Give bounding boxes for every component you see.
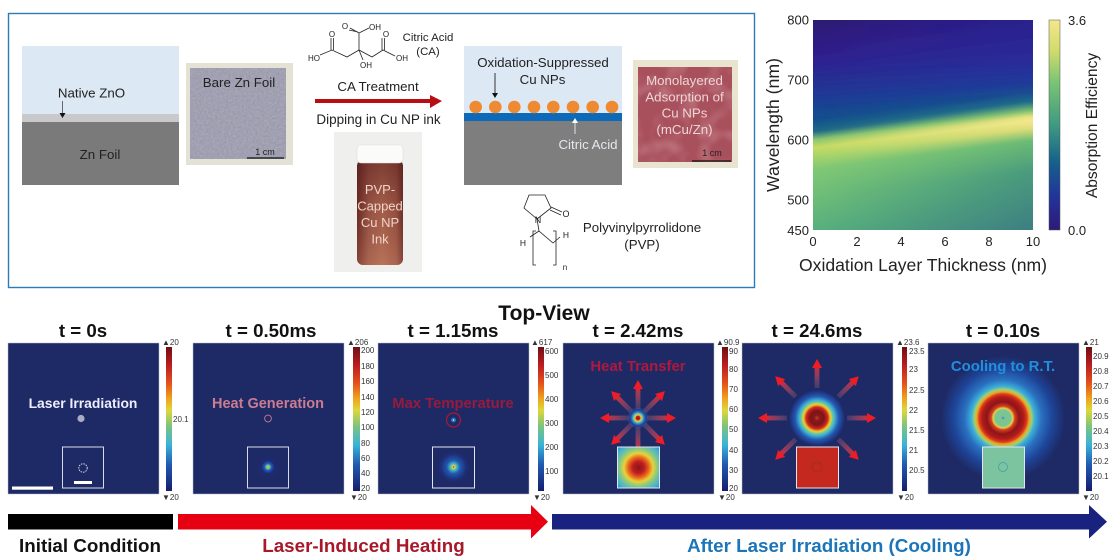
timeline: initial condition [8,514,173,556]
panel: t = 2.42ms: 30 [729,466,738,475]
panel: t = 0.10s: ▲21 [1082,338,1099,347]
y axis: 700 [787,72,809,88]
panel: t = 0.50ms: 80 [361,439,370,448]
panel: t = 0.10s: 20.1 [1093,472,1109,481]
x axis [799,234,1047,275]
photo: monolayered Cu NPs on Zn: Monolayered [646,73,723,88]
label: dipping step: Dipping in Cu NP ink [316,112,441,127]
panel: t = 2.42ms: 60 [729,405,738,414]
panel: t = 0.10s: 20.8 [1093,367,1109,376]
panel: t = 1.15ms: 600 [545,347,559,356]
photo: bare Zn foil [186,63,293,165]
arrows: heat spreading outward [758,359,876,463]
panel: t = 0.10s: 20.7 [1093,382,1109,391]
photo: bare Zn foil: Bare Zn Foil [203,75,275,90]
colorbar: Absorption Efficiency [1084,53,1101,198]
panel: t = 0.10s: Cooling to R.T. [951,359,1055,375]
chemical structure: PVP: H [520,238,526,248]
panel: t = 2.42ms: t = 2.42ms [593,320,683,341]
x axis: 10 [1026,234,1040,249]
label: polyvinylpyrrolidone: (PVP) [624,237,660,252]
chemical structure: citric acid [308,22,408,70]
chemical structure: citric acid: O [342,22,348,31]
panel: t = 1.15ms: 200 [545,443,559,452]
panel: t = 2.42ms: ▼20 [718,493,735,502]
panel: t = 24.6ms: 21 [909,446,918,455]
chemical structure: citric acid: OH [369,23,381,32]
panel: t = 24.6ms: 23.5 [909,347,925,356]
panel: t = 2.42ms: 80 [729,365,738,374]
panel: t = 0.10s: 20.5 [1093,412,1109,421]
panel: t = 24.6ms: 20.5 [909,466,925,475]
panel: t = 1.15ms: ▲617 [531,338,553,347]
panel: t = 0.50ms: ▼20 [350,493,367,502]
panel: t = 0.10s [928,320,1109,502]
photo: PVP-capped Cu NP ink bottle: Capped [357,198,403,214]
panel: t = 2.42ms: 90 [729,347,738,356]
x axis: 2 [853,234,861,249]
panel: t = 0.10s: 20.2 [1093,457,1109,466]
x axis: 4 [897,234,905,249]
panel: t = 24.6ms [742,320,925,502]
timeline: laser-induced heating: Laser-Induced Heating [262,535,465,556]
schematic: oxidation-suppressed Cu NPs: Cu NPs [520,72,566,87]
colorbar: 3.6 [1068,13,1086,28]
panel: t = 24.6ms: 23 [909,365,918,374]
schematic: oxidation-suppressed Cu NPs: Citric Acid [558,137,618,152]
chemical structure: PVP: N [535,215,541,225]
chemical structure: PVP: H [563,230,569,240]
panel: t = 0.50ms: 160 [361,377,375,386]
panel: t = 0.50ms: 40 [361,469,370,478]
label: citric acid: Citric Acid [403,32,453,44]
chemical structure: citric acid: OH [360,61,372,70]
panel: t = 1.15ms [378,320,559,502]
panel: t = 24.6ms: 22 [909,406,918,415]
panel: t = 2.42ms: Heat Transfer [590,359,686,375]
colorbar [1049,13,1101,238]
y axis [763,12,809,238]
panel: t = 1.15ms: Max Temperature [392,396,514,412]
panel: t = 2.42ms: 70 [729,385,738,394]
label: CA treatment: CA Treatment [337,79,419,94]
photo: PVP-capped Cu NP ink bottle: Cu NP [361,215,399,230]
panel: t = 0.50ms: 200 [361,346,375,355]
panel: t = 1.15ms: 400 [545,395,559,404]
panel: t = 24.6ms: 21.5 [909,426,925,435]
panel: t = 0s: t = 0s [59,320,107,341]
panel: t = 1.15ms: 500 [545,371,559,380]
photo: monolayered Cu NPs on Zn: (mCu/Zn) [656,122,713,137]
panel: t = 0.10s: 20.4 [1093,427,1109,436]
schematic: bare Zn foil with native ZnO [22,46,179,185]
panel: t = 0s: ▼20 [162,493,179,502]
arrows: heat spreading outward [600,380,676,456]
panel: t = 1.15ms: ▼20 [533,493,550,502]
photo: PVP-capped Cu NP ink bottle [334,132,422,272]
panel: t = 2.42ms: 40 [729,446,738,455]
schematic: bare Zn foil with native ZnO: Zn Foil [80,147,120,162]
heading: Top-View: Top-View [498,302,590,325]
chemical structure: citric acid: O [383,30,389,39]
panel: t = 0.50ms: 100 [361,423,375,432]
x axis: Oxidation Layer Thickness (nm) [799,255,1047,275]
timeline: laser-induced heating [178,505,548,556]
chemical structure: PVP: n [563,263,567,272]
photo: monolayered Cu NPs on Zn [633,60,738,168]
chemical structure: PVP [520,195,570,272]
panel: t = 0s: Laser Irradiation [29,395,137,411]
panel: t = 0s: ▲20 [162,338,179,347]
panel: t = 0.50ms: t = 0.50ms [226,320,316,341]
panel: t = 0.10s: 20.3 [1093,442,1109,451]
arrow: process direction [315,95,442,108]
panel: t = 1.15ms: 100 [545,467,559,476]
photo: bare Zn foil: 1 cm [255,147,275,157]
y axis: 800 [787,12,809,28]
photo: monolayered Cu NPs on Zn: 1 cm [702,148,722,158]
panel: t = 0.10s: ▼20 [1082,493,1099,502]
chart: absorption efficiency heat map [763,0,1101,275]
panel: t = 0.50ms: 120 [361,408,375,417]
panel: t = 0.50ms: 60 [361,454,370,463]
panel: t = 0.10s: 20.9 [1093,352,1109,361]
label: polyvinylpyrrolidone: Polyvinylpyrrolidone [583,220,701,235]
timeline: initial condition: Initial Condition [19,535,161,556]
panel: t = 0.50ms: ▲206 [347,338,369,347]
x axis: 0 [809,234,817,249]
panel: t = 0.10s: t = 0.10s [966,320,1040,341]
panel: Cu NP adsorption process [8,14,754,288]
x axis: 8 [985,234,993,249]
panel: t = 0s: 20.1 [173,415,189,424]
panel: t = 24.6ms: ▼20 [897,493,914,502]
panel: t = 1.15ms: 300 [545,419,559,428]
chemical structure: PVP: O [562,209,570,219]
panel: t = 0.50ms [193,320,375,502]
y axis: 600 [787,132,809,148]
panel: t = 2.42ms: 50 [729,425,738,434]
panel: t = 0.50ms: 180 [361,362,375,371]
y axis: 450 [787,223,809,238]
chemical structure: citric acid: OH [396,54,408,63]
schematic: oxidation-suppressed Cu NPs: Oxidation-Suppressed [477,55,609,70]
panel: t = 0.50ms: 20 [361,484,370,493]
panel: t = 24.6ms: 22.5 [909,386,925,395]
panel: t = 2.42ms: ▲90.9 [716,338,740,347]
schematic: bare Zn foil with native ZnO: Native ZnO [58,86,125,100]
y axis: 500 [787,192,809,208]
label: citric acid: (CA) [416,46,440,58]
chemical structure: citric acid: O [329,30,335,39]
timeline: after laser irradiation [552,505,1107,556]
x axis: 6 [941,234,949,249]
photo: monolayered Cu NPs on Zn: Cu NPs [662,106,708,121]
schematic: oxidation-suppressed Cu NPs [464,46,622,185]
panel: t = 0.50ms: 140 [361,393,375,402]
panel: t = 2.42ms: 20 [729,484,738,493]
panel: t = 0s [8,320,189,502]
colorbar: 0.0 [1068,223,1086,238]
heat map surface [813,20,1033,230]
panel: t = 24.6ms: t = 24.6ms [772,320,862,341]
panel: t = 24.6ms: ▲23.6 [896,338,920,347]
photo: PVP-capped Cu NP ink bottle: PVP- [365,182,395,197]
photo: monolayered Cu NPs on Zn: Adsorption of [645,89,724,104]
panel: t = 1.15ms: t = 1.15ms [408,320,498,341]
panel: t = 0.10s: 20.6 [1093,397,1109,406]
chemical structure: citric acid: HO [308,54,320,63]
photo: PVP-capped Cu NP ink bottle: Ink [371,232,389,246]
panel: t = 2.42ms [563,320,740,502]
panel: t = 0.50ms: Heat Generation [212,396,324,412]
y axis: Wavelength (nm) [763,58,783,192]
timeline: after laser irradiation: After Laser Irradiation (Cooling) [687,535,971,556]
